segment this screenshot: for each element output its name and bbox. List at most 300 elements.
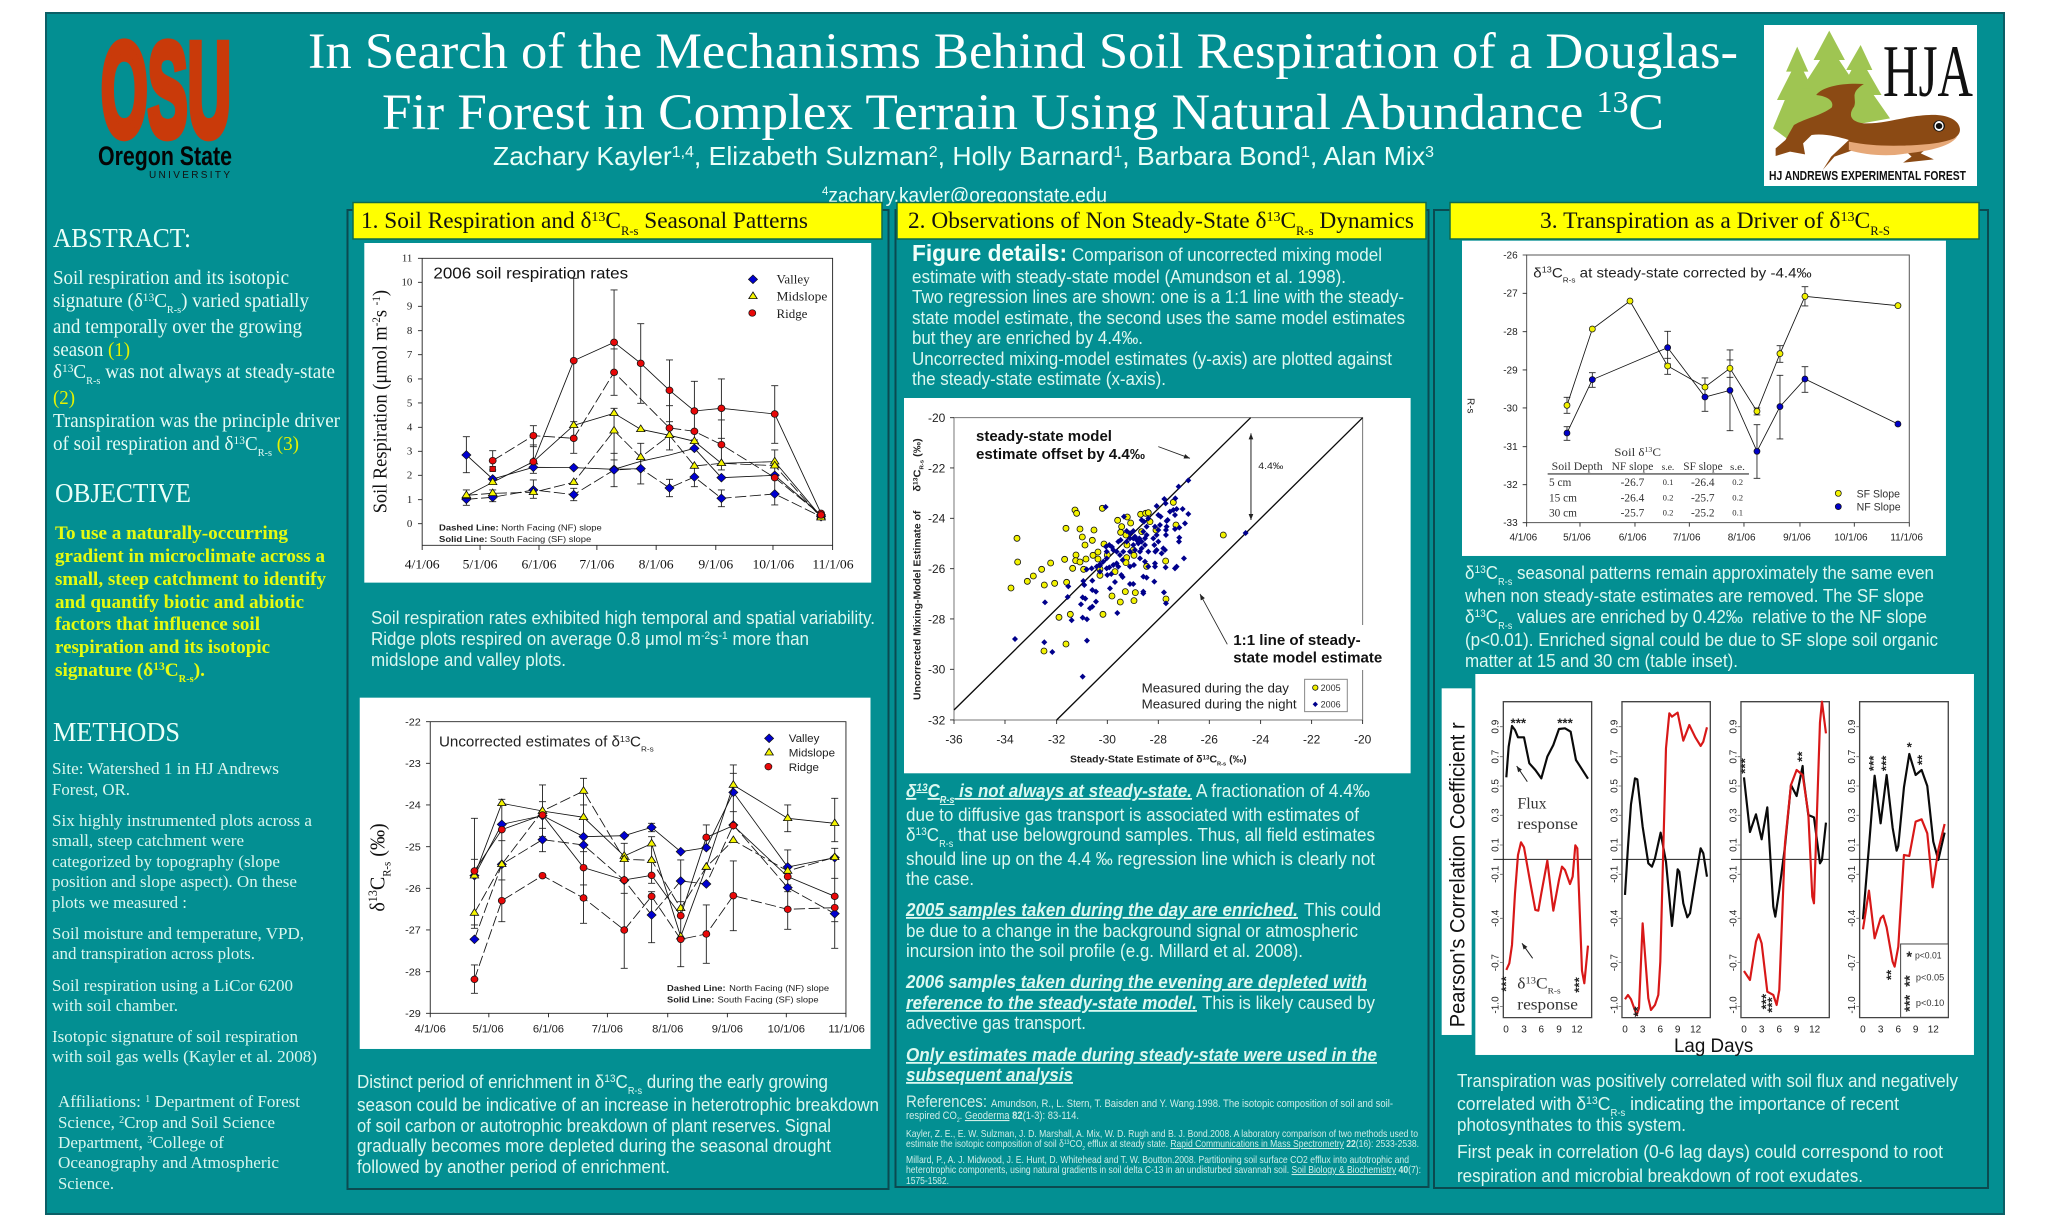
heading: panel 1 — [353, 202, 882, 239]
y axis title: δ13CR-s (‰) — [913, 438, 926, 492]
y axis tick labels: 0.9 — [1728, 719, 1739, 734]
legend: Valley — [789, 733, 820, 745]
text: respiration rate summary: Ridge plots respired on average 0.8 μmol m-2s-1 more than — [371, 629, 809, 649]
x axis tick labels: 6/1/06 — [533, 1024, 564, 1035]
x axis tick labels: -28 — [1150, 732, 1167, 746]
x axis tick labels: 12 — [1690, 1025, 1702, 1036]
axes frames and zero lines — [1503, 702, 1948, 1018]
x axis tick labels — [1503, 1025, 1939, 1036]
legend: Ridge — [776, 307, 808, 321]
callout: 4.4 permil gap: 4.4‰ — [1258, 461, 1284, 471]
chart: 2006 soil respiration rates — [364, 243, 871, 583]
x axis tick labels: 8/1/06 — [1728, 533, 1756, 544]
x axis tick labels — [415, 1024, 865, 1035]
series: ridge south-facing — [533, 342, 821, 513]
y axis tick labels: 0.5 — [1847, 779, 1858, 793]
significance stars: *** — [1765, 996, 1780, 1013]
chart: steady-state corrected series — [1453, 241, 1946, 556]
legend: Measured during the day — [1142, 681, 1289, 696]
legend: p-values: * — [1906, 950, 1912, 966]
y axis tick labels: -26 — [1503, 250, 1518, 261]
text: transpiration conclusions — [1457, 1071, 1958, 1186]
series: isotope response — [1506, 702, 1945, 1015]
text: enrichment summary: followed by another period of enrichment. — [357, 1157, 670, 1177]
y axis tick labels: 0.1 — [1847, 838, 1858, 852]
points: 2005 daytime samples — [1011, 502, 1223, 651]
legend: Midslope — [789, 748, 835, 759]
OSU logo: Oregon State — [98, 141, 232, 171]
y axis tick labels — [401, 254, 413, 530]
y axis tick labels: -28 — [405, 967, 421, 978]
y axis tick labels: -0.4 — [1728, 909, 1739, 927]
icon: forest trees — [1773, 31, 1890, 140]
slope note: North Facing (NF) slope — [729, 983, 829, 993]
y axis tick labels: 0.5 — [1491, 779, 1502, 793]
text: steady-state interpretation: This could — [1304, 900, 1381, 920]
x axis tick labels: 9/1/06 — [698, 557, 734, 571]
x axis tick labels: 10/1/06 — [752, 557, 795, 571]
x axis tick labels: -30 — [1099, 732, 1116, 746]
references — [906, 1092, 1421, 1187]
title: Fir Forest in Complex Terrain Using Natural Abundance 13C — [382, 85, 1664, 141]
methods text: Six highly instrumented plots across a — [52, 811, 312, 830]
legend — [765, 733, 835, 774]
table: soil carbon isotope by depth: s.e. — [1662, 462, 1674, 472]
x axis tick labels: 10/1/06 — [768, 1024, 805, 1035]
x axis tick labels: 9/1/06 — [1783, 533, 1811, 544]
clipped axis fragment: C — [1453, 407, 1474, 421]
y axis tick labels: -23 — [405, 758, 421, 770]
y axis tick labels: -28 — [928, 612, 946, 626]
y axis tick labels: -0.7 — [1491, 954, 1502, 971]
y axis tick labels: -26 — [405, 883, 421, 895]
y axis tick labels: -26 — [928, 562, 946, 576]
y axis tick labels: -1.0 — [1491, 996, 1502, 1014]
text: transpiration conclusions: photosynthates to this system. — [1457, 1115, 1686, 1135]
callout: flux response: response — [1517, 816, 1578, 833]
text: steady-state interpretation: due to diffusive gas transport is associated with estimates of — [906, 805, 1360, 825]
abstract text: (2) — [53, 388, 75, 409]
x axis title: Steady-State Estimate of δ 13CR-s (‰) — [1070, 754, 1247, 767]
icon: salamander — [1776, 84, 1960, 170]
y axis tick labels: -30 — [1503, 403, 1518, 414]
panel: transpiration as a driver — [1434, 202, 1988, 1188]
slope note: South Facing (SF) slope — [490, 534, 592, 544]
error bars — [1564, 287, 1808, 478]
y axis tick labels: 0.9 — [1491, 719, 1502, 734]
x axis tick labels — [945, 732, 1372, 746]
legend: p-values: ** — [1902, 975, 1918, 987]
y axis title box: Pearson's Correlation Coefficient r — [1446, 722, 1470, 1027]
x axis tick labels: -20 — [1354, 732, 1372, 746]
legend — [1142, 679, 1347, 712]
x axis title: Lag Days — [1674, 1036, 1753, 1057]
y axis tick labels: 0.7 — [1728, 749, 1739, 764]
text: steady-state interpretation: 2006 samples — [905, 972, 1016, 992]
table: soil carbon isotope by depth: 15 cm — [1549, 492, 1577, 504]
text: seasonal pattern summary: matter at 15 and 30 cm (table inset). — [1465, 651, 1738, 671]
x axis tick labels: -34 — [996, 732, 1014, 746]
significance stars: *** — [1759, 993, 1774, 1009]
callout: 1:1 line: state model estimate — [1233, 651, 1382, 667]
panel: non steady-state dynamics — [896, 202, 1428, 1187]
affiliations: Department, 3College of — [58, 1133, 224, 1152]
x axis tick labels: -26 — [1201, 732, 1218, 746]
text: figure details: Comparison of uncorrected mixing model — [1072, 245, 1382, 265]
x axis tick labels: 9 — [1794, 1025, 1800, 1036]
y axis tick labels: -31 — [1503, 442, 1518, 453]
legend: Ridge — [789, 762, 819, 774]
slope note — [667, 983, 829, 1005]
text: figure details: Two regression lines are shown: one is a 1:1 line with the steady- — [912, 287, 1404, 307]
y axis tick labels — [928, 411, 946, 727]
heading: panel 3 — [1450, 202, 1979, 239]
text: respiration rate summary: Soil respiration rates exhibited high temporal and spatial variability. — [371, 608, 875, 628]
regression lines — [954, 418, 1363, 720]
y axis tick labels: -32 — [1503, 480, 1518, 491]
methods heading: METHODS — [53, 717, 180, 747]
series: valley north-facing — [466, 469, 821, 517]
abstract text: of soil respiration and δ13CR-s (3) — [53, 434, 299, 458]
HJA logo — [1764, 25, 1977, 186]
objective text: factors that influence soil — [55, 614, 260, 635]
y axis title: Uncorrected Mixing-Model Estimate of — [913, 510, 924, 700]
x axis tick labels: 8/1/06 — [652, 1024, 683, 1035]
objective text: gradient in microclimate across a — [55, 546, 325, 567]
y axis tick labels: 0.1 — [1609, 838, 1620, 852]
objective text: To use a naturally-occurring — [55, 523, 289, 544]
abstract text: δ13CR-s was not always at steady-state — [53, 362, 335, 386]
y axis tick labels — [405, 717, 421, 1020]
text: figure details: Figure details: — [912, 240, 1067, 266]
objective text: signature (δ13CR-s). — [55, 660, 205, 684]
slope note: South Facing (SF) slope — [718, 995, 819, 1005]
x axis tick labels: 6 — [1539, 1025, 1545, 1036]
significance stars: ** — [1884, 969, 1899, 980]
x axis tick labels: 10/1/06 — [1834, 533, 1868, 544]
text: respiration rate summary: midslope and valley plots. — [371, 650, 566, 670]
x axis tick labels: 0 — [1503, 1025, 1509, 1036]
text: steady-state interpretation: δ13CR-s is not always at steady-state. — [906, 781, 1192, 806]
table: soil carbon isotope by depth: -26.4 — [1691, 477, 1715, 489]
y axis tick labels: 0.1 — [1728, 838, 1739, 852]
significance stars: *** — [1499, 975, 1514, 992]
legend — [1835, 488, 1901, 514]
y axis tick labels: -0.1 — [1491, 865, 1502, 883]
text: steady-state interpretation: taken during the evening are depleted with — [1016, 972, 1367, 992]
chart: correlation panels — [1442, 674, 1974, 1057]
x axis tick labels: 11/1/06 — [828, 1024, 865, 1035]
legend: Midslope — [776, 290, 828, 304]
y axis tick labels: 0.3 — [1491, 808, 1502, 822]
references: Millard, P., A. J. Midwood, J. E. Hunt, D. Whitehead and T. W. Boutton.2008. Partitioning soil surface CO2 efflux into autotrophic and — [906, 1154, 1409, 1166]
slope note: Solid Line: — [439, 534, 488, 544]
y axis tick labels: 0.3 — [1847, 808, 1858, 822]
methods text: small, steep catchment were — [52, 831, 244, 850]
references: Amundson, R., L. Stern, T. Baisden and Y. Wang.1998. The isotopic composition of soil and soil- — [991, 1098, 1393, 1110]
abstract text: season (1) — [53, 340, 130, 361]
y axis tick labels: -1.0 — [1847, 996, 1858, 1014]
callout: 1:1 line: 1:1 line of steady- — [1233, 633, 1361, 649]
text: transpiration conclusions: correlated with δ13CR-s indicating the importance of recent — [1457, 1094, 1899, 1118]
table: soil carbon isotope by depth: NF slope — [1612, 461, 1653, 473]
text: figure details — [912, 240, 1405, 389]
text: steady-state interpretation: incursion into the soil profile (e.g. Millard et al. 2008). — [906, 941, 1303, 961]
y axis tick labels: -22 — [405, 717, 421, 728]
x axis tick labels: 7/1/06 — [1673, 533, 1701, 544]
y axis tick labels: -0.1 — [1728, 865, 1739, 883]
table: soil carbon isotope by depth: -25.2 — [1691, 508, 1715, 520]
x axis tick labels: 4/1/06 — [415, 1024, 446, 1035]
callout: isotope response: δ13CR-s — [1517, 975, 1561, 995]
y axis title — [913, 438, 926, 700]
contact email: 4zachary.kayler@oregonstate.edu — [822, 184, 1107, 207]
series: south-facing slope — [1567, 296, 1898, 411]
x axis tick labels: 9 — [1556, 1025, 1562, 1036]
y axis tick labels: 3 — [407, 447, 412, 458]
abstract text — [53, 268, 340, 458]
legend — [748, 273, 828, 321]
y axis tick labels: 0.5 — [1728, 779, 1739, 793]
callout: 1:1 line — [1200, 594, 1382, 667]
y axis tick labels: -0.4 — [1847, 909, 1858, 927]
x axis tick labels: 6 — [1658, 1025, 1664, 1036]
slope note — [439, 523, 602, 544]
slope note: North Facing (NF) slope — [501, 523, 602, 533]
y axis tick labels: 0.1 — [1491, 838, 1502, 852]
y axis tick labels: 0.7 — [1847, 749, 1858, 764]
callout: flux response — [1517, 766, 1578, 833]
table: soil carbon isotope by depth: 5 cm — [1549, 477, 1572, 489]
text: steady-state interpretation: subsequent analysis — [906, 1065, 1073, 1085]
series: valley south-facing — [474, 792, 835, 876]
text: seasonal pattern summary — [1464, 563, 1938, 671]
clipped axis fragment: R-s — [1464, 398, 1475, 414]
table: soil carbon isotope by depth: 0.2 — [1663, 508, 1673, 518]
y axis tick labels: -0.7 — [1847, 954, 1858, 971]
x axis tick labels: 4/1/06 — [405, 557, 440, 571]
y axis tick labels: -32 — [928, 713, 946, 727]
table: soil carbon isotope by depth: 30 cm — [1549, 508, 1577, 520]
references: heterotrophic components, using natural gradients in soil delta C-13 in an undisturbed savannah soil. Soil Biology & Biochemistry 40(7): — [906, 1164, 1421, 1176]
y axis tick labels: -0.1 — [1609, 865, 1620, 883]
significance stars: ** — [1915, 754, 1930, 765]
abstract text: and temporally over the growing — [53, 317, 302, 338]
table: soil carbon isotope by depth: -25.7 — [1691, 492, 1715, 504]
series: midslope north-facing — [474, 791, 835, 913]
text: enrichment summary: season could be indicative of an increase in heterotrophic breakdown — [357, 1095, 879, 1115]
x axis tick labels: 5/1/06 — [1563, 533, 1591, 544]
y axis tick labels: 9 — [407, 302, 412, 313]
legend: p-values — [1901, 944, 1948, 1017]
objective text: respiration and its isotopic — [55, 637, 270, 658]
x axis tick labels — [1509, 533, 1923, 544]
clipped axis fragment — [1468, 398, 1474, 414]
series: ridge south-facing — [474, 815, 835, 916]
x axis tick labels: 3 — [1759, 1025, 1765, 1036]
text: steady-state interpretation: 2005 samples taken during the day are enriched. — [905, 900, 1298, 920]
objective text: small, steep catchment to identify — [55, 569, 326, 590]
legend: Measured during the night — [1142, 696, 1297, 711]
text: enrichment summary: of soil carbon or autotrophic breakdown of plant reserves. Signal — [357, 1116, 831, 1136]
x axis tick labels: 8/1/06 — [639, 557, 674, 571]
methods text: Soil moisture and temperature, VPD, — [52, 924, 304, 943]
y axis tick labels: 10 — [401, 278, 412, 289]
legend: Valley — [776, 273, 810, 287]
callout: steady-state offset: steady-state model — [976, 429, 1112, 445]
y axis tick labels: 0 — [407, 519, 412, 530]
methods text: Site: Watershed 1 in HJ Andrews — [52, 759, 279, 778]
x axis tick labels: 9 — [1675, 1025, 1681, 1036]
y axis tick labels: -24 — [405, 800, 421, 812]
text: steady-state interpretation: This is likely caused by — [1202, 993, 1375, 1013]
slope note: Dashed Line: — [439, 523, 499, 533]
legend: 2006 — [1321, 699, 1341, 709]
y axis tick labels: 0.9 — [1609, 719, 1620, 734]
x axis tick labels: 0 — [1622, 1025, 1628, 1036]
x axis tick labels: 11/1/06 — [812, 557, 854, 571]
y axis tick labels: -30 — [928, 663, 946, 677]
significance stars: *** — [1511, 715, 1527, 730]
x axis tick labels: 9 — [1913, 1025, 1919, 1036]
significance stars: *** — [1879, 755, 1894, 771]
text: seasonal pattern summary: when non steady-state estimates are removed. The SF slope — [1464, 586, 1924, 606]
y axis tick labels: 0.9 — [1847, 719, 1858, 734]
y axis tick labels: 5 — [407, 399, 412, 409]
affiliations: Science. — [58, 1174, 114, 1193]
chart title: 2006 soil respiration rates — [433, 265, 628, 282]
significance stars: *** — [1571, 976, 1586, 993]
text: steady-state interpretation: should line up on the 4.4 ‰ regression line which is clearly not — [906, 849, 1375, 869]
x axis tick labels: 6 — [1896, 1025, 1902, 1036]
slope note: Solid Line: — [667, 995, 715, 1005]
methods text: Soil respiration using a LiCor 6200 — [52, 976, 293, 995]
y axis tick labels: 0.7 — [1609, 749, 1620, 764]
x axis tick labels: 7/1/06 — [592, 1024, 623, 1035]
objective heading: OBJECTIVE — [55, 478, 191, 508]
callout: isotope response — [1517, 943, 1578, 1013]
legend: p-values: p<0.10 — [1916, 998, 1944, 1008]
methods text: categorized by topography (slope — [52, 852, 280, 871]
y axis tick labels: 11 — [402, 254, 412, 265]
OSU logo: UNIVERSITY — [149, 170, 230, 181]
significance stars: *** — [1737, 757, 1752, 774]
title: In Search of the Mechanisms Behind Soil Respiration of a Douglas- — [308, 24, 1738, 80]
text: enrichment summary: Distinct period of enrichment in δ13CR-s during the early growing — [357, 1072, 828, 1096]
callout: steady-state offset — [976, 429, 1190, 463]
panel: soil respiration seasonal patterns — [348, 202, 888, 1189]
x axis tick labels: 3 — [1521, 1025, 1527, 1036]
text: seasonal pattern summary: δ13CR-s values are enriched by 0.42‰ relative to the NF slope — [1465, 607, 1927, 632]
text: figure details: estimate with steady-state model (Amundson et al. 1998). — [912, 267, 1346, 287]
series: ridge north-facing — [474, 876, 835, 979]
HJA logo: HJA — [1883, 31, 1973, 113]
table: soil carbon isotope by depth: SF slope — [1683, 461, 1723, 473]
text: steady-state interpretation: the case. — [906, 869, 974, 889]
series: valley south-facing — [466, 455, 641, 479]
y axis tick labels: -24 — [928, 512, 946, 526]
y axis tick labels: -1.0 — [1609, 996, 1620, 1014]
text: steady-state interpretation: δ13CR-s that use belowground samples. Thus, all field estimates — [906, 825, 1375, 850]
chart title: Uncorrected estimates of δ13CR-s — [439, 734, 654, 753]
table: soil carbon isotope by depth: 0.1 — [1732, 508, 1743, 518]
affiliations: Science, 2Crop and Soil Science — [58, 1113, 275, 1132]
methods text: Forest, OR. — [52, 780, 130, 799]
x axis tick labels: 4/1/06 — [1509, 533, 1538, 544]
table: soil carbon isotope by depth: 0.2 — [1732, 492, 1743, 502]
y axis tick labels: -29 — [1503, 365, 1518, 376]
x axis tick labels: 3 — [1878, 1025, 1884, 1036]
affiliations: Oceanography and Atmospheric — [58, 1153, 279, 1172]
table: soil carbon isotope by depth: 0.1 — [1663, 477, 1673, 487]
y axis tick labels: 7 — [407, 350, 412, 361]
methods text: plots we measured : — [52, 893, 187, 912]
text: transpiration conclusions: Transpiration was positively correlated with soil flux and negatively — [1457, 1071, 1958, 1091]
significance stars: *** — [1557, 715, 1574, 730]
significance stars — [1499, 715, 1930, 1017]
text: steady-state interpretation: reference to the steady-state model. — [906, 993, 1197, 1013]
legend: p-values: *** — [1902, 994, 1918, 1012]
x axis tick labels: -36 — [945, 732, 963, 746]
y axis tick labels: 0.5 — [1609, 779, 1620, 793]
text: steady-state interpretation: advective gas transport. — [906, 1013, 1086, 1033]
x axis tick labels: 5/1/06 — [473, 1024, 504, 1035]
x axis tick labels: 12 — [1928, 1025, 1939, 1036]
x axis tick labels: 6/1/06 — [522, 557, 557, 571]
x axis tick labels: -22 — [1303, 732, 1321, 746]
series: flux response — [1506, 726, 1945, 926]
methods text: with soil gas wells (Kayler et al. 2008) — [52, 1047, 317, 1066]
y axis tick labels: -0.1 — [1847, 865, 1858, 883]
y axis tick labels: 0.7 — [1491, 749, 1502, 764]
text: figure details: Uncorrected mixing-model estimates (y-axis) are plotted against — [912, 349, 1392, 369]
y axis tick labels — [1503, 250, 1518, 529]
text: steady-state interpretation — [905, 781, 1381, 1085]
heading: panel 3: 3. Transpiration as a Driver of δ 13CR-S — [1540, 208, 1890, 238]
references: respired CO2. Geoderma 82(1-3): 83-114. — [906, 1110, 1079, 1124]
methods text: Isotopic signature of soil respiration — [52, 1027, 298, 1046]
series: north-facing slope — [1567, 348, 1898, 451]
chart title: δ13CR-s at steady-state corrected by -4.4‰ — [1533, 264, 1812, 284]
x axis tick labels: 6 — [1777, 1025, 1783, 1036]
x axis tick labels: -32 — [1048, 732, 1066, 746]
methods text — [52, 759, 317, 1066]
y axis tick labels: -28 — [1503, 327, 1518, 338]
OSU logo: OSU — [101, 15, 231, 164]
abstract heading: ABSTRACT: — [53, 223, 191, 253]
y axis tick labels: 8 — [407, 326, 412, 337]
slope note: Dashed Line: — [667, 983, 726, 993]
error bars — [471, 765, 838, 993]
text: seasonal pattern summary: δ13CR-s seasonal patterns remain approximately the same even — [1465, 563, 1934, 588]
title — [308, 24, 1738, 141]
legend: 2005 — [1321, 683, 1341, 693]
table: soil carbon isotope by depth: -26.4 — [1621, 492, 1645, 504]
x axis tick labels: 7/1/06 — [579, 557, 615, 571]
x axis tick labels: 3 — [1640, 1025, 1646, 1036]
y axis tick labels: 2 — [407, 471, 412, 482]
text: figure details: but they are enriched by 4.4‰. — [912, 328, 1143, 348]
text: enrichment summary: gradually becomes more depleted during the seasonal drought — [357, 1136, 831, 1156]
methods text: position and slope aspect). On these — [52, 872, 297, 891]
text: steady-state interpretation: be due to a change in the background signal or atmospheric — [906, 921, 1358, 941]
abstract text: Soil respiration and its isotopic — [53, 268, 289, 289]
y axis tick labels: 6 — [407, 375, 412, 385]
text: figure details: the steady-state estimate (x-axis). — [912, 369, 1166, 389]
text: enrichment summary — [357, 1072, 879, 1177]
y axis tick labels: 0.3 — [1609, 808, 1620, 822]
text: respiration rate summary — [371, 608, 875, 670]
